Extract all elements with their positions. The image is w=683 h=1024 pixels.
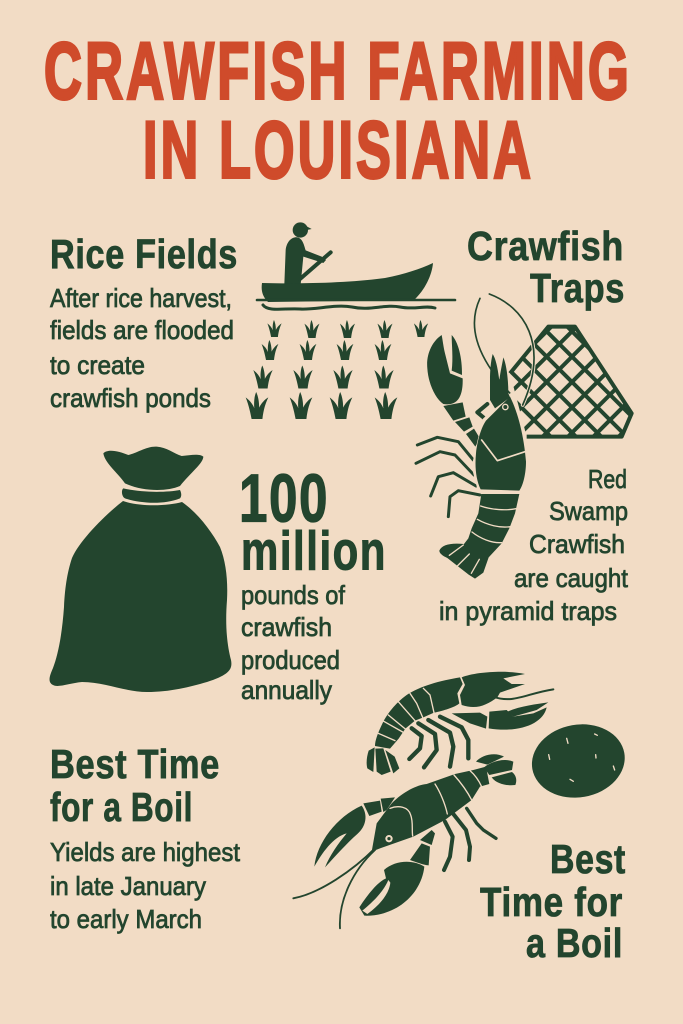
icon: pyramid trap [475, 324, 634, 439]
icon: farmer in boat over rice field [246, 222, 455, 419]
text block: production description: produced [241, 645, 340, 675]
heading: crawfish traps: Traps [530, 265, 625, 311]
text block: rice fields description: to create [50, 350, 145, 380]
icon: sack [50, 447, 231, 692]
heading: crawfish traps [467, 223, 625, 311]
heading: best time for a boil (right): Best [550, 836, 626, 882]
heading: best time for a boil: Best Time [50, 741, 220, 787]
icon: pyramid trap and crawfish [414, 293, 634, 579]
water line [257, 299, 455, 301]
icon: upper crawfish [367, 672, 553, 775]
text block: boil season: Yields are highest [50, 837, 241, 867]
tail [439, 494, 519, 579]
panel: best time for a boil text [50, 741, 241, 934]
heading: best time for a boil (right): a Boil [526, 920, 623, 966]
icon: potato [526, 717, 631, 805]
icon: red swamp crawfish [416, 294, 534, 579]
number: 100: 100 [239, 460, 329, 536]
heading: best time for a boil (right) [480, 836, 626, 966]
text block: production description: crawfish [241, 612, 332, 642]
text block: production description: pounds of [241, 580, 346, 610]
text block: boil season: to early March [50, 904, 202, 934]
heading: best time for a boil: for a Boil [50, 784, 193, 830]
legs [417, 437, 473, 460]
water ripple [263, 305, 435, 309]
heading: best time for a boil (right): Time for [480, 879, 623, 925]
statistic: 100 million pounds [239, 460, 387, 705]
text block: red swamp crawfish caught in pyramid traps: in pyramid traps [439, 596, 617, 626]
text block: production description [241, 580, 346, 705]
heading: crawfish traps: Crawfish [467, 223, 624, 269]
carapace [476, 397, 526, 491]
icon: lower crawfish [293, 754, 516, 928]
icon: crawfish and potato group [293, 672, 631, 928]
heading: best time for a boil [50, 741, 220, 830]
number unit: million: million [241, 520, 387, 582]
icon: boat [262, 263, 433, 302]
heading: rice fields: Rice Fields [50, 231, 238, 277]
text block: red swamp crawfish caught in pyramid traps: Swamp [549, 496, 628, 526]
claw [427, 335, 463, 404]
text block: boil season: in late January [50, 871, 206, 901]
halo and rostrum [474, 397, 526, 490]
title [44, 26, 632, 196]
text block: rice fields description: fields are flooded [50, 315, 234, 345]
panel: rice fields text [50, 231, 238, 413]
icon: rice plants [246, 320, 428, 419]
antennae [474, 298, 510, 393]
text block: red swamp crawfish caught in pyramid traps: Red [588, 464, 627, 494]
text block: red swamp crawfish caught in pyramid traps: Crawfish [529, 529, 625, 559]
text block: boil season [50, 837, 241, 934]
text block: production description: annually [241, 675, 332, 705]
text block: rice fields description: After rice harvest, [50, 283, 232, 313]
text block: red swamp crawfish caught in pyramid traps: are caught [514, 563, 629, 593]
text block: rice fields description [50, 283, 234, 413]
text block: rice fields description: crawfish ponds [50, 383, 211, 413]
icon: farmer [284, 222, 331, 284]
text block: red swamp crawfish caught in pyramid traps [439, 464, 629, 626]
